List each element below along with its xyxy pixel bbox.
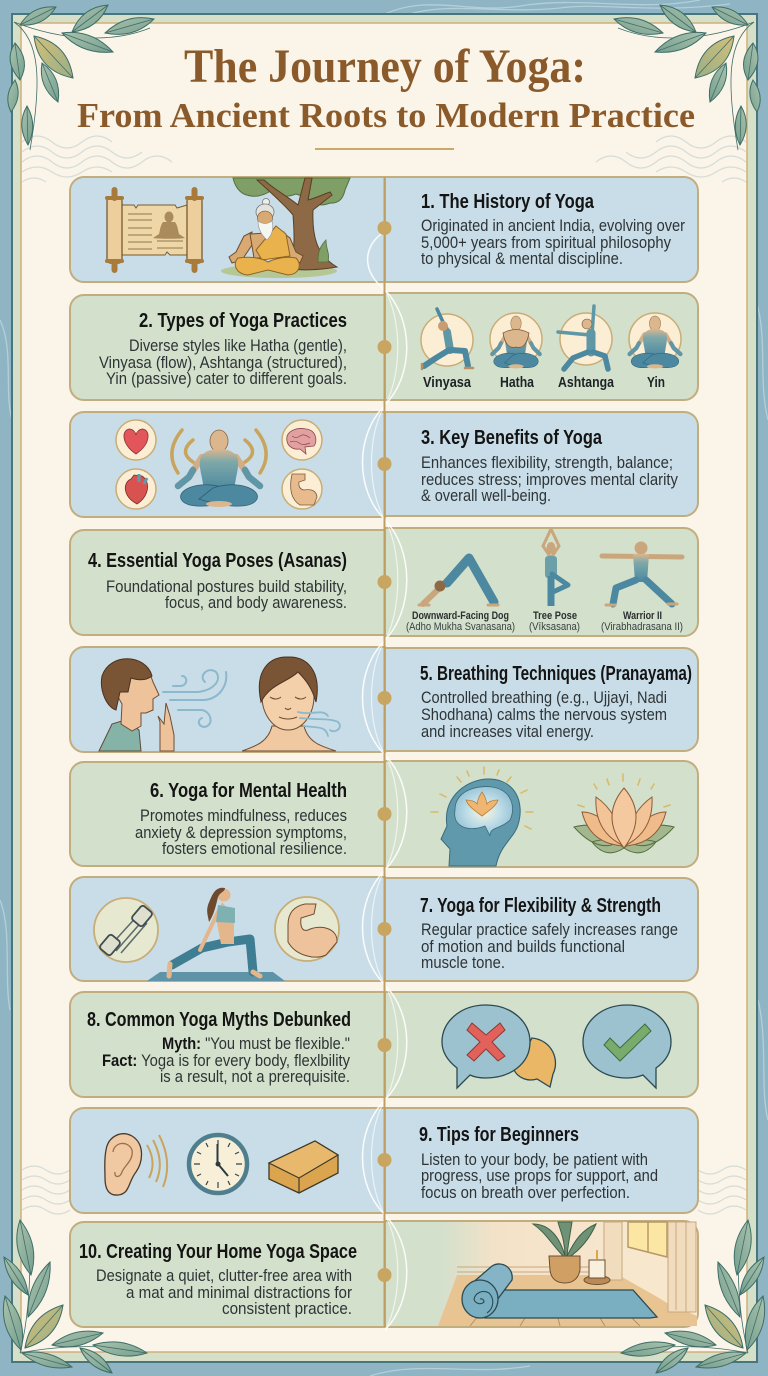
pose captions: (Adho Mukha Svanasana) bbox=[406, 621, 515, 633]
icon: lunge figure bbox=[147, 888, 285, 981]
body text: Controlled breathing (e.g., Ujjayi, Nadi bbox=[421, 689, 667, 707]
corner leaves: top left bbox=[8, 5, 154, 150]
icon: heart bbox=[116, 420, 156, 460]
pose captions: Downward-Facing Dog bbox=[412, 610, 509, 622]
icon: scroll bbox=[105, 190, 204, 270]
icon: downward dog bbox=[419, 558, 498, 605]
body text bbox=[135, 807, 347, 858]
icon: fact bubble with check bbox=[583, 1005, 671, 1088]
body text: Fact: Yoga is for every body, flexlbility bbox=[102, 1052, 351, 1070]
body text: is a result, not a prerequisite. bbox=[160, 1068, 350, 1086]
body text: of motion and builds functional bbox=[421, 938, 625, 956]
icon: clock bbox=[189, 1135, 247, 1193]
icon: ashtanga pose bbox=[558, 306, 612, 369]
panel: 7 flexibility bbox=[70, 877, 698, 981]
heading: 1. The History of Yoga bbox=[421, 191, 595, 213]
corner leaves: top right bbox=[614, 5, 760, 150]
panel: 5 breathing bbox=[70, 647, 698, 752]
icon: brain bbox=[282, 420, 322, 460]
body text: and increases vital energy. bbox=[421, 723, 594, 741]
body text: muscle tone. bbox=[421, 954, 505, 972]
icon: yoga block bbox=[269, 1141, 338, 1193]
corner leaves: bottom left bbox=[3, 1220, 147, 1373]
body text: 5,000+ years from spiritual philosophy bbox=[421, 234, 672, 252]
panel: 4 poses bbox=[70, 528, 698, 636]
body text bbox=[421, 1151, 658, 1202]
body text: consistent practice. bbox=[222, 1300, 352, 1318]
corner leaves: bottom right bbox=[621, 1220, 765, 1373]
icon: airflow swirls bbox=[163, 670, 226, 727]
icon: sage bbox=[229, 198, 303, 275]
heading: 6. Yoga for Mental Health bbox=[150, 780, 347, 802]
heading: 7. Yoga for Flexibility & Strength bbox=[420, 895, 661, 917]
body text bbox=[106, 578, 347, 612]
pose labels bbox=[423, 375, 665, 391]
icon: man breathing bbox=[99, 659, 174, 751]
body text: Listen to your body, be patient with bbox=[421, 1151, 648, 1169]
heading: 8. Common Yoga Myths Debunked bbox=[87, 1009, 351, 1031]
illustration: room scene bbox=[438, 1222, 697, 1326]
icon: anatomical heart bbox=[116, 469, 156, 509]
body text: focus on breath over perfection. bbox=[421, 1184, 630, 1202]
timeline bbox=[362, 177, 407, 1330]
heading: 10. Creating Your Home Yoga Space bbox=[79, 1241, 357, 1263]
decorative waves bbox=[22, 136, 746, 1214]
body text bbox=[99, 337, 347, 388]
body text: Enhances flexibility, strength, balance; bbox=[421, 454, 673, 472]
icon: meditating figure bbox=[172, 430, 266, 507]
icon: lotus bbox=[574, 774, 674, 853]
body text bbox=[96, 1267, 352, 1318]
pose labels: Ashtanga bbox=[558, 375, 615, 391]
body text: reduces stress; improves mental clarity bbox=[421, 471, 679, 489]
icon: vinyasa pose bbox=[421, 309, 473, 369]
panel: 1 history bbox=[70, 177, 698, 282]
icon: resistance band bbox=[94, 898, 158, 962]
body text bbox=[102, 1035, 351, 1086]
body text bbox=[421, 217, 685, 268]
timeline dots bbox=[378, 221, 392, 1282]
title divider bbox=[315, 148, 454, 150]
body text: Foundational postures build stability, bbox=[106, 578, 347, 596]
heading: 3. Key Benefits of Yoga bbox=[421, 427, 603, 449]
icon: orange speech bubble bbox=[514, 1038, 555, 1087]
icon: myth bubble with cross bbox=[442, 1005, 530, 1088]
icon: arm bbox=[282, 469, 322, 509]
panel: 9 tips bbox=[70, 1108, 698, 1213]
icon: tree bbox=[221, 178, 350, 278]
body text: Designate a quiet, clutter-free area with bbox=[96, 1267, 352, 1285]
body text: focus, and body awareness. bbox=[165, 594, 347, 612]
panel: 2 types bbox=[70, 293, 698, 400]
body text bbox=[421, 689, 667, 741]
body text: Myth: "You must be flexible." bbox=[162, 1035, 350, 1053]
pose labels: Yin bbox=[647, 375, 665, 391]
panel: 6 mental health bbox=[70, 761, 698, 867]
body text: a mat and minimal distractions for bbox=[126, 1284, 352, 1302]
pose captions: Tree Pose bbox=[533, 610, 577, 622]
body text: progress, use props for support, and bbox=[421, 1167, 658, 1185]
body text bbox=[421, 454, 679, 505]
heading: 9. Tips for Beginners bbox=[419, 1124, 579, 1146]
pose captions: Warrior II bbox=[623, 610, 662, 622]
body text: anxiety & depression symptoms, bbox=[135, 824, 347, 842]
icon: tree pose bbox=[543, 529, 568, 606]
pose labels: Vinyasa bbox=[423, 375, 472, 391]
body text: fosters emotional resilience. bbox=[162, 840, 347, 858]
title line 2: From Ancient Roots to Modern Practice bbox=[77, 96, 695, 135]
panel: 8 myths bbox=[70, 992, 698, 1097]
body text: Originated in ancient India, evolving over bbox=[421, 217, 685, 235]
icon: flexed arm bbox=[275, 897, 339, 961]
icon: warrior II bbox=[602, 542, 682, 605]
body text bbox=[421, 921, 678, 972]
pose captions: (Virabhadrasana II) bbox=[601, 621, 683, 633]
body text: Regular practice safely increases range bbox=[421, 921, 678, 939]
heading: 2. Types of Yoga Practices bbox=[139, 310, 347, 332]
icon: woman breathing bbox=[242, 657, 340, 751]
body text: & overall well-being. bbox=[421, 487, 551, 505]
body text: Diverse styles like Hatha (gentle), bbox=[129, 337, 347, 355]
body text: Yin (passive) cater to different goals. bbox=[106, 370, 347, 388]
icon: mind head bbox=[431, 767, 533, 866]
panel: 10 home space bbox=[70, 1221, 698, 1327]
body text: to physical & mental discipline. bbox=[421, 250, 623, 268]
icon: ear bbox=[105, 1134, 167, 1195]
body text: Vinyasa (flow), Ashtanga (structured), bbox=[99, 354, 347, 372]
pose captions: (Vīksasana) bbox=[529, 621, 580, 633]
title line 1: The Journey of Yoga: bbox=[184, 40, 586, 93]
heading: 5. Breathing Techniques (Pranayama) bbox=[420, 663, 692, 685]
icon: hatha pose bbox=[490, 313, 542, 368]
body text: Promotes mindfulness, reduces bbox=[140, 807, 347, 825]
heading: 4. Essential Yoga Poses (Asanas) bbox=[88, 550, 347, 572]
body text: Shodhana) calms the nervous system bbox=[421, 706, 667, 724]
icon: yin pose bbox=[629, 313, 681, 368]
pose labels: Hatha bbox=[500, 375, 535, 391]
title bbox=[77, 40, 695, 135]
panel: 3 benefits bbox=[70, 412, 698, 517]
pose captions bbox=[406, 610, 683, 633]
